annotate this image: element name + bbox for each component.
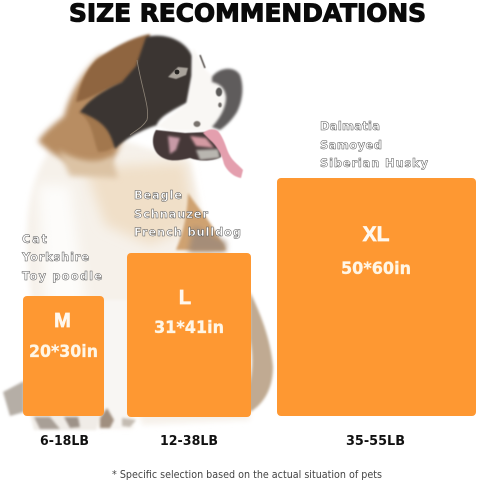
XL label: XL <box>363 223 390 246</box>
dog mouth <box>153 130 222 161</box>
panel: size M <box>23 296 104 416</box>
dog eye <box>168 67 188 79</box>
dog head brown fur <box>76 34 150 102</box>
L mat <box>127 253 251 417</box>
XL dimensions: 50*60in <box>341 259 411 279</box>
dog nose and lip <box>212 69 242 130</box>
panel: size L <box>127 253 251 417</box>
dog white leg <box>100 300 134 428</box>
dog left white fur <box>38 185 100 375</box>
breed list: XL <box>320 119 428 170</box>
L label: L <box>179 287 191 309</box>
M label: M <box>54 310 71 332</box>
weight: L: 12-38LB <box>160 433 218 449</box>
dog ear edge line <box>130 60 148 135</box>
breed list: L: French bulldog <box>134 225 241 239</box>
breed list: M <box>21 232 102 283</box>
dog shoulder brown patch <box>176 193 226 250</box>
breed list: XL: Dalmatia <box>320 119 380 133</box>
L dimensions: 31*41in <box>154 318 224 338</box>
dog tail <box>246 292 273 412</box>
dog chest shading <box>85 162 195 245</box>
dog head dark patch <box>80 36 192 149</box>
weight: XL: 35-55LB <box>346 433 405 449</box>
breed list: L <box>134 188 241 239</box>
breed list: M: Yorkshire <box>21 250 89 264</box>
weight: M: 6-18LB <box>40 433 89 449</box>
breed list: L: Schnauzer <box>134 207 208 221</box>
dog paws <box>30 414 100 430</box>
dog muzzle white <box>157 48 236 131</box>
footnote: * Specific selection based on the actual situation of pets <box>112 468 382 481</box>
dog forehead streak <box>200 55 205 68</box>
breed list: XL: Samoyed <box>320 138 382 152</box>
breed list: M: Toy poodle <box>22 269 102 283</box>
M dimensions: 20*30in <box>29 342 98 362</box>
XL mat <box>277 178 476 416</box>
breed list: XL: Siberian Husky <box>320 156 428 170</box>
breed list: M: Cat <box>22 232 48 246</box>
dog tongue <box>203 129 243 178</box>
dog body <box>27 140 250 428</box>
dog freckles <box>216 88 222 96</box>
dog neck mane <box>38 56 132 168</box>
M mat <box>23 296 104 416</box>
illustration: Saint Bernard dog <box>3 34 273 430</box>
dog lower brown fur <box>78 112 116 152</box>
breed list: L: Beagle <box>134 188 182 202</box>
panel: size XL <box>277 178 476 416</box>
